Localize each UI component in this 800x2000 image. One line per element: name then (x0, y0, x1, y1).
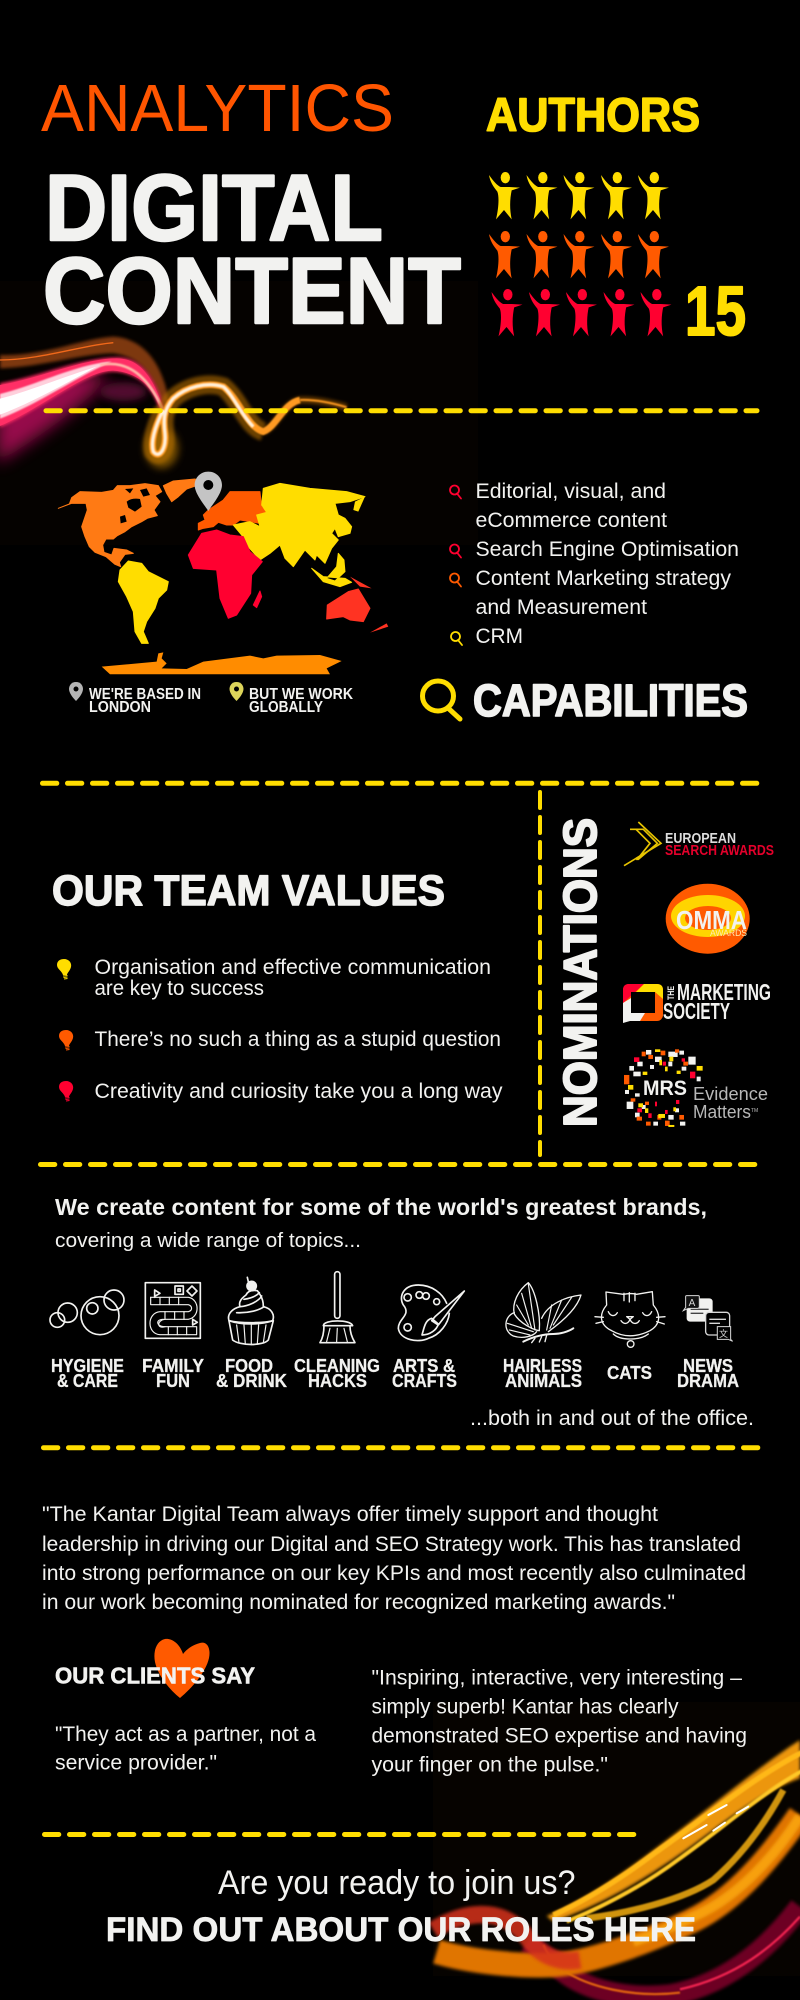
capabilities list: Search Engine Optimisation (476, 537, 739, 561)
logo: omma awards: OMMA (676, 905, 747, 935)
quote: inspiring: simply superb! Kantar has clearly (372, 1696, 679, 1718)
quote: partner: service provider." (55, 1752, 217, 1774)
icon: red lens (450, 486, 461, 498)
icon: red lens 2 (450, 544, 461, 558)
label: based in london (89, 686, 201, 716)
topic labels: FUN (156, 1370, 190, 1391)
quote: kantar digital team: "The Kantar Digital Team always offer timely support and thought (42, 1503, 658, 1526)
icon: palette (398, 1285, 464, 1341)
pictogram: 15 authors (489, 172, 671, 336)
quote: kantar digital team (42, 1503, 746, 1614)
label: based in london: WE'RE BASED IN (89, 686, 201, 703)
icon: large magnifier (422, 681, 460, 719)
logo: omma awards: AWARDS (710, 928, 747, 938)
quote: kantar digital team: in our work becoming nominated for recognized marketing awards." (42, 1591, 675, 1614)
topic labels: & DRINK (216, 1370, 288, 1391)
icon: cat (595, 1292, 665, 1347)
icon: translated news (683, 1296, 733, 1341)
logo: mrs evidence matters (624, 1049, 768, 1127)
capabilities list: Editorial, visual, and (476, 479, 666, 503)
icon: translated news: 文 (719, 1328, 728, 1339)
logo: the marketing society (623, 979, 771, 1024)
icon: butterfly (506, 1283, 581, 1343)
topic labels: CRAFTS (392, 1370, 457, 1391)
quote: kantar digital team: into strong performance on our key KPIs and most recently also culminated (42, 1562, 746, 1585)
light streak panel: bottom (433, 1702, 800, 1996)
topic labels: CLEANING (294, 1355, 380, 1376)
topic labels: FOOD (225, 1355, 273, 1376)
label: work globally: GLOBALLY (249, 699, 323, 716)
capabilities list: Content Marketing strategy (476, 566, 731, 590)
logo: mrs evidence matters: Evidence (693, 1084, 768, 1104)
topic labels: CATS (607, 1362, 652, 1383)
quote: inspiring: "Inspiring, interactive, very interesting – (372, 1666, 742, 1690)
title: digital: DIGITAL (45, 155, 383, 260)
heading: authors: AUTHORS (486, 88, 700, 141)
icon: yellow lens (451, 632, 462, 645)
list: team values: There’s no such a thing as a stupid question (94, 1028, 501, 1051)
topic labels: & CARE (57, 1370, 118, 1391)
logo: european search awards (624, 822, 774, 866)
quote: inspiring: demonstrated SEO expertise and having (372, 1724, 747, 1748)
icon: orange lens (450, 574, 461, 586)
stat: 15: 15 (685, 272, 746, 350)
capabilities list (450, 479, 739, 648)
heading: our clients say: OUR CLIENTS SAY (55, 1662, 255, 1688)
call to action: question: Are you ready to join us? (218, 1864, 576, 1902)
topic labels: NEWS (683, 1355, 733, 1376)
heading: nominations: NOMINATIONS (554, 818, 606, 1127)
text: brands intro (55, 1194, 707, 1252)
list: team values (57, 956, 503, 1103)
label: work globally (249, 686, 353, 716)
icon: yellow bulb (57, 959, 71, 979)
topic labels: HACKS (308, 1370, 367, 1391)
list: team values: are key to success (94, 977, 264, 1000)
text: brands intro: We create content for some of the world's greatest brands, (55, 1194, 707, 1220)
quote: inspiring: your finger on the pulse." (372, 1754, 608, 1776)
heading: our team values: OUR TEAM VALUES (52, 867, 445, 915)
logo: the marketing society: SOCIETY (663, 998, 730, 1024)
world map (58, 472, 388, 674)
quote: partner (55, 1723, 316, 1774)
text: brands intro: covering a wide range of topics... (55, 1230, 361, 1252)
quote: partner: "They act as a partner, not a (55, 1723, 316, 1746)
heading: capabilities: CAPABILITIES (473, 675, 748, 726)
pin: global (230, 682, 244, 701)
logo: the marketing society: THE (666, 986, 676, 1000)
logo: mrs evidence matters: TM (751, 1108, 758, 1114)
logo: mrs evidence matters: Matters (693, 1102, 751, 1122)
icon: broom (320, 1272, 355, 1343)
icon: cupcake (229, 1277, 273, 1345)
logo: omma awards (666, 884, 750, 954)
list: team values: Organisation and effective communication (94, 956, 491, 979)
list: team values: Creativity and curiosity take you a long way (94, 1080, 503, 1103)
topic labels: DRAMA (677, 1370, 739, 1391)
icon: translated news: A (689, 1298, 696, 1309)
topic labels: ARTS & (393, 1355, 455, 1376)
label: based in london: LONDON (89, 699, 151, 716)
title: analytics: ANALYTICS (41, 71, 394, 146)
capabilities list: CRM (476, 624, 523, 648)
icon: board game (145, 1283, 200, 1338)
title: content: CONTENT (43, 238, 461, 343)
topic labels: HYGIENE (51, 1355, 124, 1376)
capabilities list: and Measurement (476, 595, 647, 619)
light streak panel: top (0, 281, 478, 545)
topic labels (51, 1355, 739, 1391)
logo: european search awards: SEARCH AWARDS (665, 843, 774, 859)
icon: orange bulb (59, 1030, 73, 1050)
icon: bubbles (50, 1290, 124, 1335)
topic labels: FAMILY (142, 1355, 205, 1376)
topic labels: ANIMALS (505, 1370, 582, 1391)
logo: mrs evidence matters: MRS (643, 1077, 687, 1100)
icon: red bulb (59, 1081, 73, 1101)
icon: heart (154, 1639, 210, 1698)
text: in and out of the office: ...both in and out of the office. (470, 1407, 754, 1430)
label: work globally: BUT WE WORK (249, 686, 353, 703)
pin: london (69, 682, 83, 701)
topic labels: HAIRLESS (503, 1355, 582, 1376)
quote: inspiring (372, 1666, 747, 1776)
call to action: roles: FIND OUT ABOUT OUR ROLES HERE (106, 1911, 696, 1949)
capabilities list: eCommerce content (476, 508, 667, 532)
logo: european search awards: EUROPEAN (665, 831, 736, 847)
quote: kantar digital team: leadership in driving our Digital and SEO Strategy work. This has translated (42, 1533, 741, 1556)
